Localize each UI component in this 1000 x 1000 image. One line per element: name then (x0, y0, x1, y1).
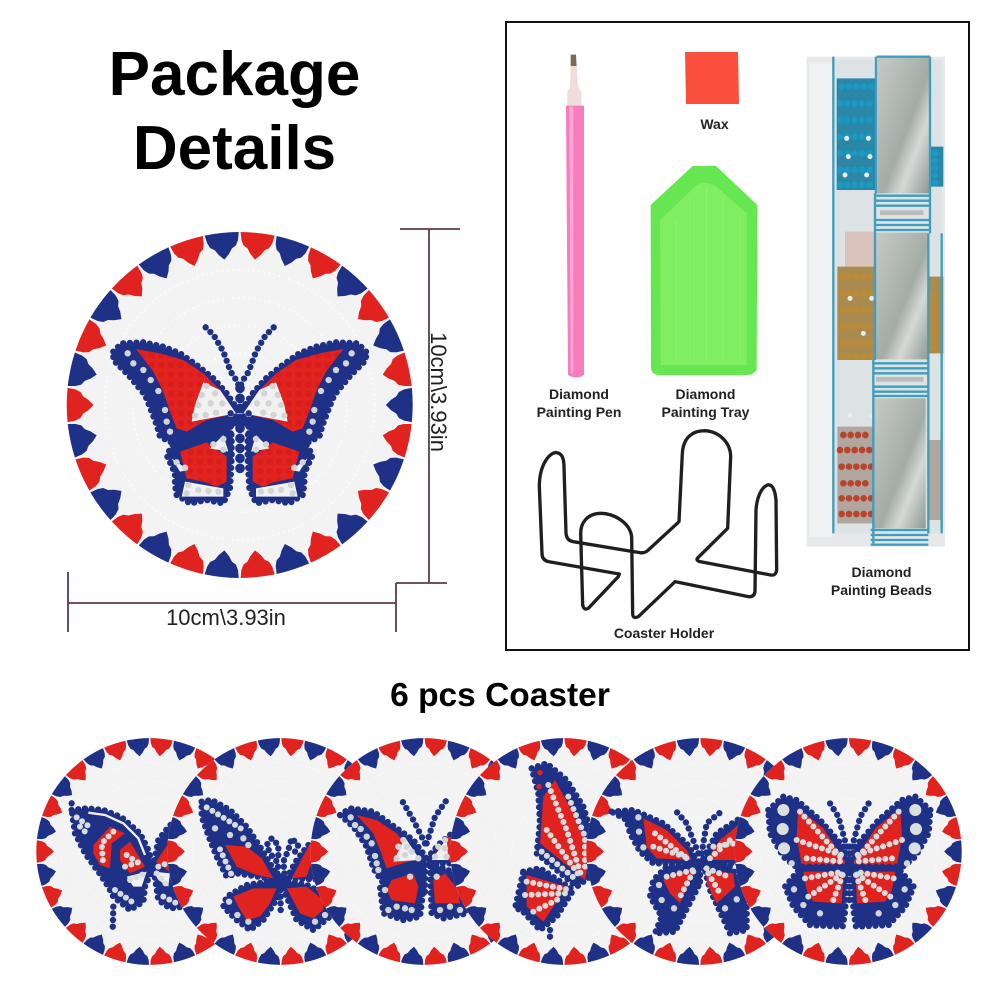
pen label: Diamond (549, 386, 609, 402)
wax label: Wax (700, 116, 729, 132)
pen label: Painting Pen (537, 404, 621, 420)
coaster 4 (450, 738, 677, 965)
icon: diamond painting beads bag (807, 57, 945, 547)
coaster 1 (36, 738, 263, 965)
height label: 10cm\3.93in (426, 332, 451, 452)
title: Package (109, 40, 360, 109)
panel: kit contents (506, 22, 969, 650)
width label: 10cm\3.93in (166, 605, 286, 630)
beads label: Painting Beads (831, 582, 932, 598)
height dimension (68, 229, 460, 632)
icon: diamond painting pen (566, 55, 584, 377)
title: Details (133, 114, 336, 183)
coaster 5 (586, 738, 813, 965)
large butterfly design (113, 327, 366, 503)
coaster holder label: Coaster Holder (614, 625, 715, 641)
coaster 3 (311, 738, 537, 965)
title (109, 40, 360, 183)
icon: coaster holder (539, 431, 777, 617)
beads label: Diamond (852, 564, 911, 580)
icon: diamond painting tray (651, 166, 757, 375)
tray label: Painting Tray (662, 404, 750, 420)
icon: wax (685, 52, 739, 104)
coaster row (36, 738, 962, 965)
coaster 2 (167, 738, 394, 965)
coaster 6 (735, 738, 962, 965)
tray label: Diamond (676, 386, 735, 402)
coaster count heading: 6 pcs Coaster (390, 677, 610, 714)
large coaster with butterfly (67, 231, 413, 579)
